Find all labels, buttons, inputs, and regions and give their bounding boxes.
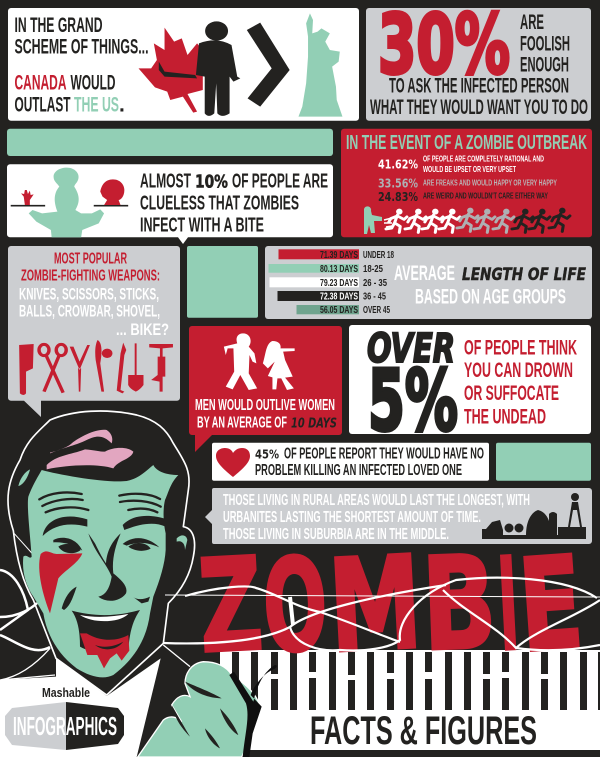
heading: weapons: MOST POPULAR bbox=[54, 250, 127, 267]
text: almost 10% clueless: INFECT WITH A BITE bbox=[140, 214, 264, 237]
panel: Canada outlasts the US bbox=[8, 8, 359, 121]
bar chart: days by age: OVER 45 bbox=[363, 304, 390, 316]
torn bottom strip bbox=[245, 750, 600, 757]
Infographics badge bbox=[5, 702, 66, 750]
panel: average length of life by age bbox=[265, 246, 592, 319]
teeth bbox=[80, 614, 128, 621]
zombie illustration group bbox=[0, 411, 277, 757]
black claw bbox=[229, 665, 277, 757]
text: 45 percent bbox=[255, 445, 484, 479]
bar chart: days by age: 26 - 35 bbox=[363, 277, 387, 289]
text: weapons list bbox=[19, 284, 169, 339]
text: outlive by 10 days bbox=[195, 397, 337, 431]
text: almost 10% clueless: OF PEOPLE ARE bbox=[232, 169, 328, 192]
Mashable wordmark: Mashable bbox=[42, 685, 90, 700]
icon: person with hockey stick bbox=[159, 40, 240, 116]
text: outlive by 10 days: 10 DAYS bbox=[291, 416, 337, 431]
left jacket outline bbox=[0, 645, 190, 680]
icon: statue of liberty bbox=[298, 13, 342, 117]
finger creases bbox=[172, 682, 238, 748]
text: outlive by 10 days: BY AN AVERAGE OF bbox=[197, 414, 287, 431]
title: ZOMBIE: O bbox=[261, 531, 330, 682]
stats list: 33.56% bbox=[378, 176, 418, 190]
stats list: WOULD BE UPSET OR VERY UPSET bbox=[423, 164, 517, 174]
bar chart: days by age: UNDER 18 bbox=[363, 249, 394, 261]
icon: farm silhouette bbox=[482, 493, 586, 539]
bar chart: days by age: 80.13 DAYS bbox=[320, 263, 358, 275]
text: grand scheme: WOULD bbox=[70, 72, 116, 94]
ear highlights bbox=[18, 469, 30, 486]
icon: man and woman zombies bbox=[224, 333, 295, 390]
logo: Mashable Infographics: INFOGRAPHICS bbox=[13, 711, 117, 741]
bar chart: days by age: 71.39 DAYS bbox=[320, 249, 358, 261]
zombie face bbox=[23, 465, 178, 677]
text: grand scheme: OUTLAST bbox=[14, 94, 71, 117]
text: rural longest bbox=[223, 492, 530, 543]
icon: zombie chasing people bbox=[364, 206, 570, 234]
panel: blank mint bar bbox=[7, 129, 333, 156]
text: weapons list: KNIVES, SCISSORS, STICKS, bbox=[19, 284, 159, 303]
bar chart: days by age: 72.38 DAYS bbox=[320, 291, 358, 303]
text: foolish enough: ARE bbox=[520, 11, 544, 34]
stats list: 24.83% bbox=[378, 190, 418, 204]
white picket fence bbox=[220, 650, 600, 757]
title: ZOMBIE: Z bbox=[195, 530, 266, 683]
text: weapons list: BALLS, CROWBAR, SHOVEL, bbox=[19, 302, 160, 321]
icon: greater-than sign bbox=[247, 23, 290, 107]
text: grand scheme: CANADA bbox=[14, 72, 66, 94]
heading: weapons bbox=[21, 250, 160, 285]
text: almost 10% clueless: ALMOST bbox=[140, 169, 191, 192]
icon: person with hand and head on plates bbox=[11, 168, 128, 237]
icon: maple leaf bbox=[139, 28, 203, 113]
panel: zombie fighting weapons bbox=[8, 246, 180, 417]
bar chart: days by age bbox=[268, 249, 394, 316]
text: almost 10% clueless: 10% bbox=[195, 171, 228, 192]
text: outlive by 10 days: MEN WOULD OUTLIVE WOMEN bbox=[195, 397, 335, 414]
heading: average length of life: AVERAGE bbox=[394, 262, 455, 285]
panel: 30 percent bbox=[366, 0, 591, 121]
heading: average length of life bbox=[394, 262, 586, 308]
text: foolish enough bbox=[370, 11, 588, 119]
title: ZOMBIE: M bbox=[325, 529, 425, 682]
text: drown or suffocate bbox=[464, 335, 577, 428]
right ear curl bbox=[177, 535, 187, 550]
text: grand scheme bbox=[14, 14, 148, 117]
stats list bbox=[378, 154, 557, 204]
text: almost 10% clueless bbox=[140, 169, 328, 237]
bar chart: days by age: 56.05 DAYS bbox=[320, 304, 358, 316]
bar chart: days by age: 36 - 45 bbox=[363, 291, 386, 303]
heading: weapons: ZOMBIE-FIGHTING WEAPONS: bbox=[21, 268, 160, 285]
head outline bbox=[8, 411, 195, 695]
title: ZOMBIE: I bbox=[494, 531, 522, 680]
bar chart: days by age: 79.23 DAYS bbox=[320, 277, 358, 289]
text: weapons list: ... BIKE? bbox=[116, 320, 169, 339]
big text: over 5%: OVER bbox=[367, 326, 455, 372]
text: grand scheme: SCHEME OF THINGS... bbox=[14, 36, 148, 58]
panel: over 5 percent bbox=[349, 325, 591, 450]
stats list: 41.62% bbox=[378, 157, 418, 171]
panel: over 5 percent: 5% bbox=[368, 352, 458, 450]
face details bbox=[43, 516, 167, 652]
icon: exposed brain bbox=[47, 430, 133, 469]
blood at eye bbox=[39, 551, 82, 613]
barbed wire bbox=[0, 570, 600, 651]
panel: men outlive women bbox=[189, 326, 342, 452]
panel: blank mint square bbox=[187, 246, 258, 318]
bar chart: days by age: 18-25 bbox=[363, 263, 383, 275]
forehead lines bbox=[39, 492, 161, 512]
text: grand scheme: . bbox=[119, 94, 125, 117]
white shirt bbox=[0, 657, 161, 757]
text: grand scheme: THE US bbox=[74, 94, 119, 117]
icons: red weapons bbox=[19, 340, 173, 395]
icons: leaf, person, arrow, statue bbox=[139, 13, 342, 117]
title: ZOMBIE: B bbox=[420, 529, 499, 680]
panel: killing a loved one bbox=[212, 443, 489, 481]
panel: clueless about bites bbox=[7, 164, 333, 244]
hand bbox=[138, 662, 261, 757]
ear line bbox=[14, 533, 33, 554]
logo: Mashable Infographics bbox=[5, 685, 124, 750]
icon: heart bbox=[216, 448, 250, 477]
text: rural longest: THOSE LIVING IN SUBURBIA ARE IN THE MIDDLE. bbox=[223, 526, 449, 543]
big number 30%: 30% bbox=[378, 0, 510, 93]
text: 45 percent: 45% bbox=[255, 447, 279, 461]
text: grand scheme: IN THE GRAND bbox=[14, 14, 102, 37]
blood on mouth bbox=[80, 633, 129, 668]
panel: blank mint block bbox=[496, 443, 591, 481]
panel: outbreak reactions bbox=[341, 129, 592, 237]
title: ZOMBIE bbox=[195, 529, 588, 683]
panel: rural urban suburban bbox=[205, 488, 592, 544]
text: almost 10% clueless: CLUELESS THAT ZOMBIES bbox=[140, 191, 299, 214]
